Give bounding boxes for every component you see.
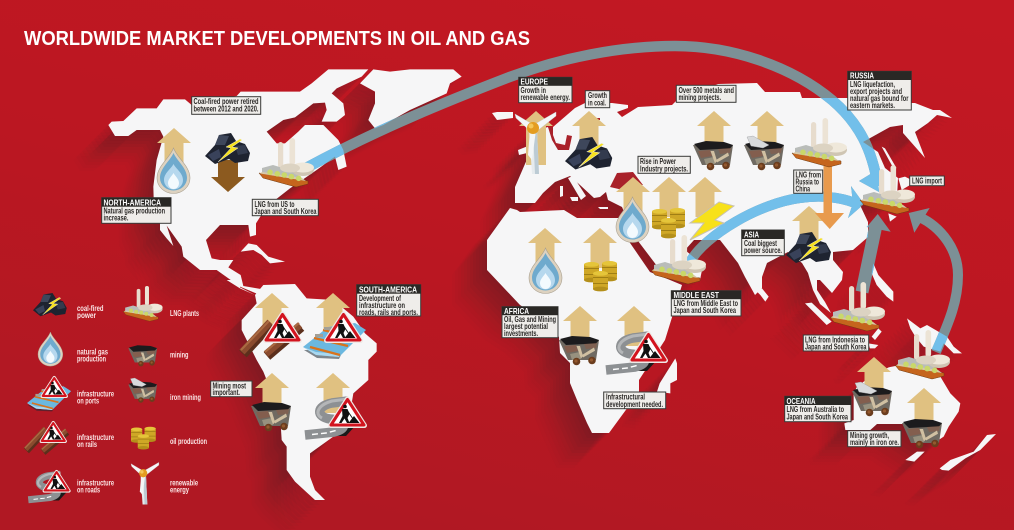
legend: infrastructure on rails: infrastructure xyxy=(77,433,114,442)
callout: Middle East: Japan and South Korea xyxy=(674,306,736,315)
arrow: LNG Russia to China xyxy=(815,165,844,229)
callout: mining growth: mainly in iron ore. xyxy=(850,438,899,447)
callout: Africa: largest potential xyxy=(504,322,548,331)
legend: infrastructure on rails xyxy=(25,423,114,452)
callout: Asia: power source. xyxy=(744,246,782,255)
legend: infrastructure on ports xyxy=(27,378,114,411)
callout: Russia: natural gas bound for xyxy=(850,94,908,103)
callout: Middle East: LNG from Middle East to xyxy=(674,299,738,308)
callout: coal-fired power retired: between 2012 and 2020. xyxy=(194,104,258,114)
legend: infrastructure on ports: infrastructure xyxy=(77,390,114,399)
callout: power industry projects: Industry projects. xyxy=(640,164,688,174)
callout: Asia: ASIA xyxy=(744,230,759,240)
legend: iron mining: iron mining xyxy=(170,393,201,402)
callout: Russia xyxy=(848,70,911,110)
callout: LNG from US xyxy=(252,199,318,216)
callout: Oceania: Japan and South Korea xyxy=(786,412,848,422)
callout: LNG Russia to China: China xyxy=(796,184,810,194)
Europe icons xyxy=(515,112,612,174)
legend: coal-fired power xyxy=(33,293,104,320)
callout: Africa: Oil, Gas and Mining xyxy=(504,315,556,324)
callout: LNG Russia to China xyxy=(794,170,823,194)
callout: Middle East: MIDDLE EAST xyxy=(674,290,720,300)
callout: Oceania: LNG from Australia to xyxy=(786,405,844,414)
callout: Middle East xyxy=(671,290,741,316)
callout: power industry projects xyxy=(638,156,690,174)
legend: infrastructure on roads: on roads xyxy=(77,485,100,494)
callout: mining most important xyxy=(211,381,252,397)
growth arrows xyxy=(157,111,941,428)
legend: mining: mining xyxy=(170,351,189,360)
callout: coal-fired power retired xyxy=(192,97,261,114)
North America icons xyxy=(157,133,314,194)
callout: Russia: LNG liquefaction, xyxy=(850,80,895,89)
callout: Europe: renewable energy. xyxy=(520,93,570,102)
LNG route arcs xyxy=(306,46,958,352)
callout: South America: roads, rails and ports. xyxy=(359,308,418,317)
callout: North America: Natural gas production xyxy=(104,206,165,216)
callout: coal-fired power retired: Coal-fired power retired xyxy=(194,97,259,106)
callout: infrastructural development xyxy=(604,392,666,409)
callout: mining growth xyxy=(848,431,901,447)
callout: Africa: AFRICA xyxy=(504,306,529,316)
callout: infrastructural development: Infrastructural xyxy=(606,392,645,402)
legend: renewable energy: energy xyxy=(170,485,189,494)
legend: coal-fired power: power xyxy=(77,311,96,320)
legend: infrastructure on roads xyxy=(28,472,114,500)
callout: mining growth: Mining growth, xyxy=(850,431,889,440)
callout: Asia xyxy=(742,230,784,256)
callout: North America: NORTH-AMERICA xyxy=(104,198,161,208)
Oceania icons xyxy=(852,330,950,448)
callout: LNG Russia to China: Russia to xyxy=(796,178,819,186)
legend: infrastructure on rails: on rails xyxy=(77,440,97,449)
callout: LNG from US: LNG from US to xyxy=(254,200,295,209)
callout: North America: increase. xyxy=(104,214,128,222)
legend: natural gas production: natural gas xyxy=(77,347,108,356)
legend xyxy=(25,286,207,505)
callout: LNG from Indonesia: Japan and South Korea xyxy=(805,342,867,352)
callout: LNG from Indonesia xyxy=(803,335,869,352)
callout: LNG from Indonesia: LNG from Indonesia to xyxy=(805,336,865,344)
callout: Asia: Coal biggest xyxy=(744,239,777,248)
legend: infrastructure on ports: on ports xyxy=(77,397,99,406)
callout: Europe: Growth in xyxy=(520,86,546,95)
callout: Europe xyxy=(519,76,572,103)
legend: natural gas production: production xyxy=(77,354,106,363)
legend: LNG plants xyxy=(123,286,199,321)
South America icons xyxy=(241,314,366,436)
callout: Oceania xyxy=(785,396,851,422)
title: WORLDWIDE MARKET DEVELOPMENTS IN OIL AND GAS xyxy=(24,28,530,50)
callout: mining most important: important. xyxy=(212,388,240,397)
callout: South America xyxy=(357,284,421,317)
legend: oil production xyxy=(131,427,207,450)
callout: mining most important: Mining most xyxy=(212,382,246,390)
legend: renewable energy: renewable xyxy=(170,478,198,487)
Africa icons xyxy=(529,248,666,371)
callout: Russia: RUSSIA xyxy=(850,70,874,80)
Middle East icons xyxy=(616,197,734,284)
callout: LNG Russia to China: LNG from xyxy=(796,170,821,180)
callout: power industry projects: Rise in Power xyxy=(640,157,676,166)
legend: coal-fired power: coal-fired xyxy=(77,304,104,313)
callout: South America: Development of xyxy=(359,294,401,303)
callout: Africa xyxy=(502,306,558,338)
legend: renewable energy xyxy=(131,462,198,505)
legend: natural gas production xyxy=(38,332,108,366)
callout: growth in coal xyxy=(585,91,610,108)
legend: infrastructure on roads: infrastructure xyxy=(77,478,114,487)
Russia and Asia icons xyxy=(693,118,915,331)
callout: metals and mining projects: Over 500 metals and xyxy=(678,86,734,95)
callout: growth in coal: Growth xyxy=(588,91,607,100)
callout: infrastructural development: development needed. xyxy=(606,400,663,409)
callout: Africa: investments. xyxy=(504,329,538,338)
legend: mining xyxy=(128,345,189,366)
callout: LNG import: LNG import xyxy=(912,176,942,186)
callout: North America xyxy=(102,198,171,223)
callout: South America: infrastructure on xyxy=(359,301,405,310)
callout: Russia: eastern markets. xyxy=(850,101,895,110)
legend: oil production: oil production xyxy=(170,437,207,446)
callout: LNG from US: Japan and South Korea xyxy=(254,207,317,216)
legend: LNG plants: LNG plants xyxy=(170,309,199,318)
callout: metals and mining projects: mining projects. xyxy=(678,93,721,102)
land shadow xyxy=(73,71,994,530)
callout: Russia: export projects and xyxy=(850,87,902,96)
world map landmasses xyxy=(108,69,996,500)
callout: LNG import xyxy=(910,176,944,186)
arrow: coal decline North America xyxy=(211,160,245,192)
callout: growth in coal: in coal. xyxy=(588,98,606,108)
callout: Oceania: OCEANIA xyxy=(786,396,816,406)
callout: metals and mining projects xyxy=(676,85,736,102)
callout: South America: SOUTH-AMERICA xyxy=(359,284,417,294)
legend: iron mining xyxy=(128,378,201,403)
callout: Europe: EUROPE xyxy=(520,76,548,86)
